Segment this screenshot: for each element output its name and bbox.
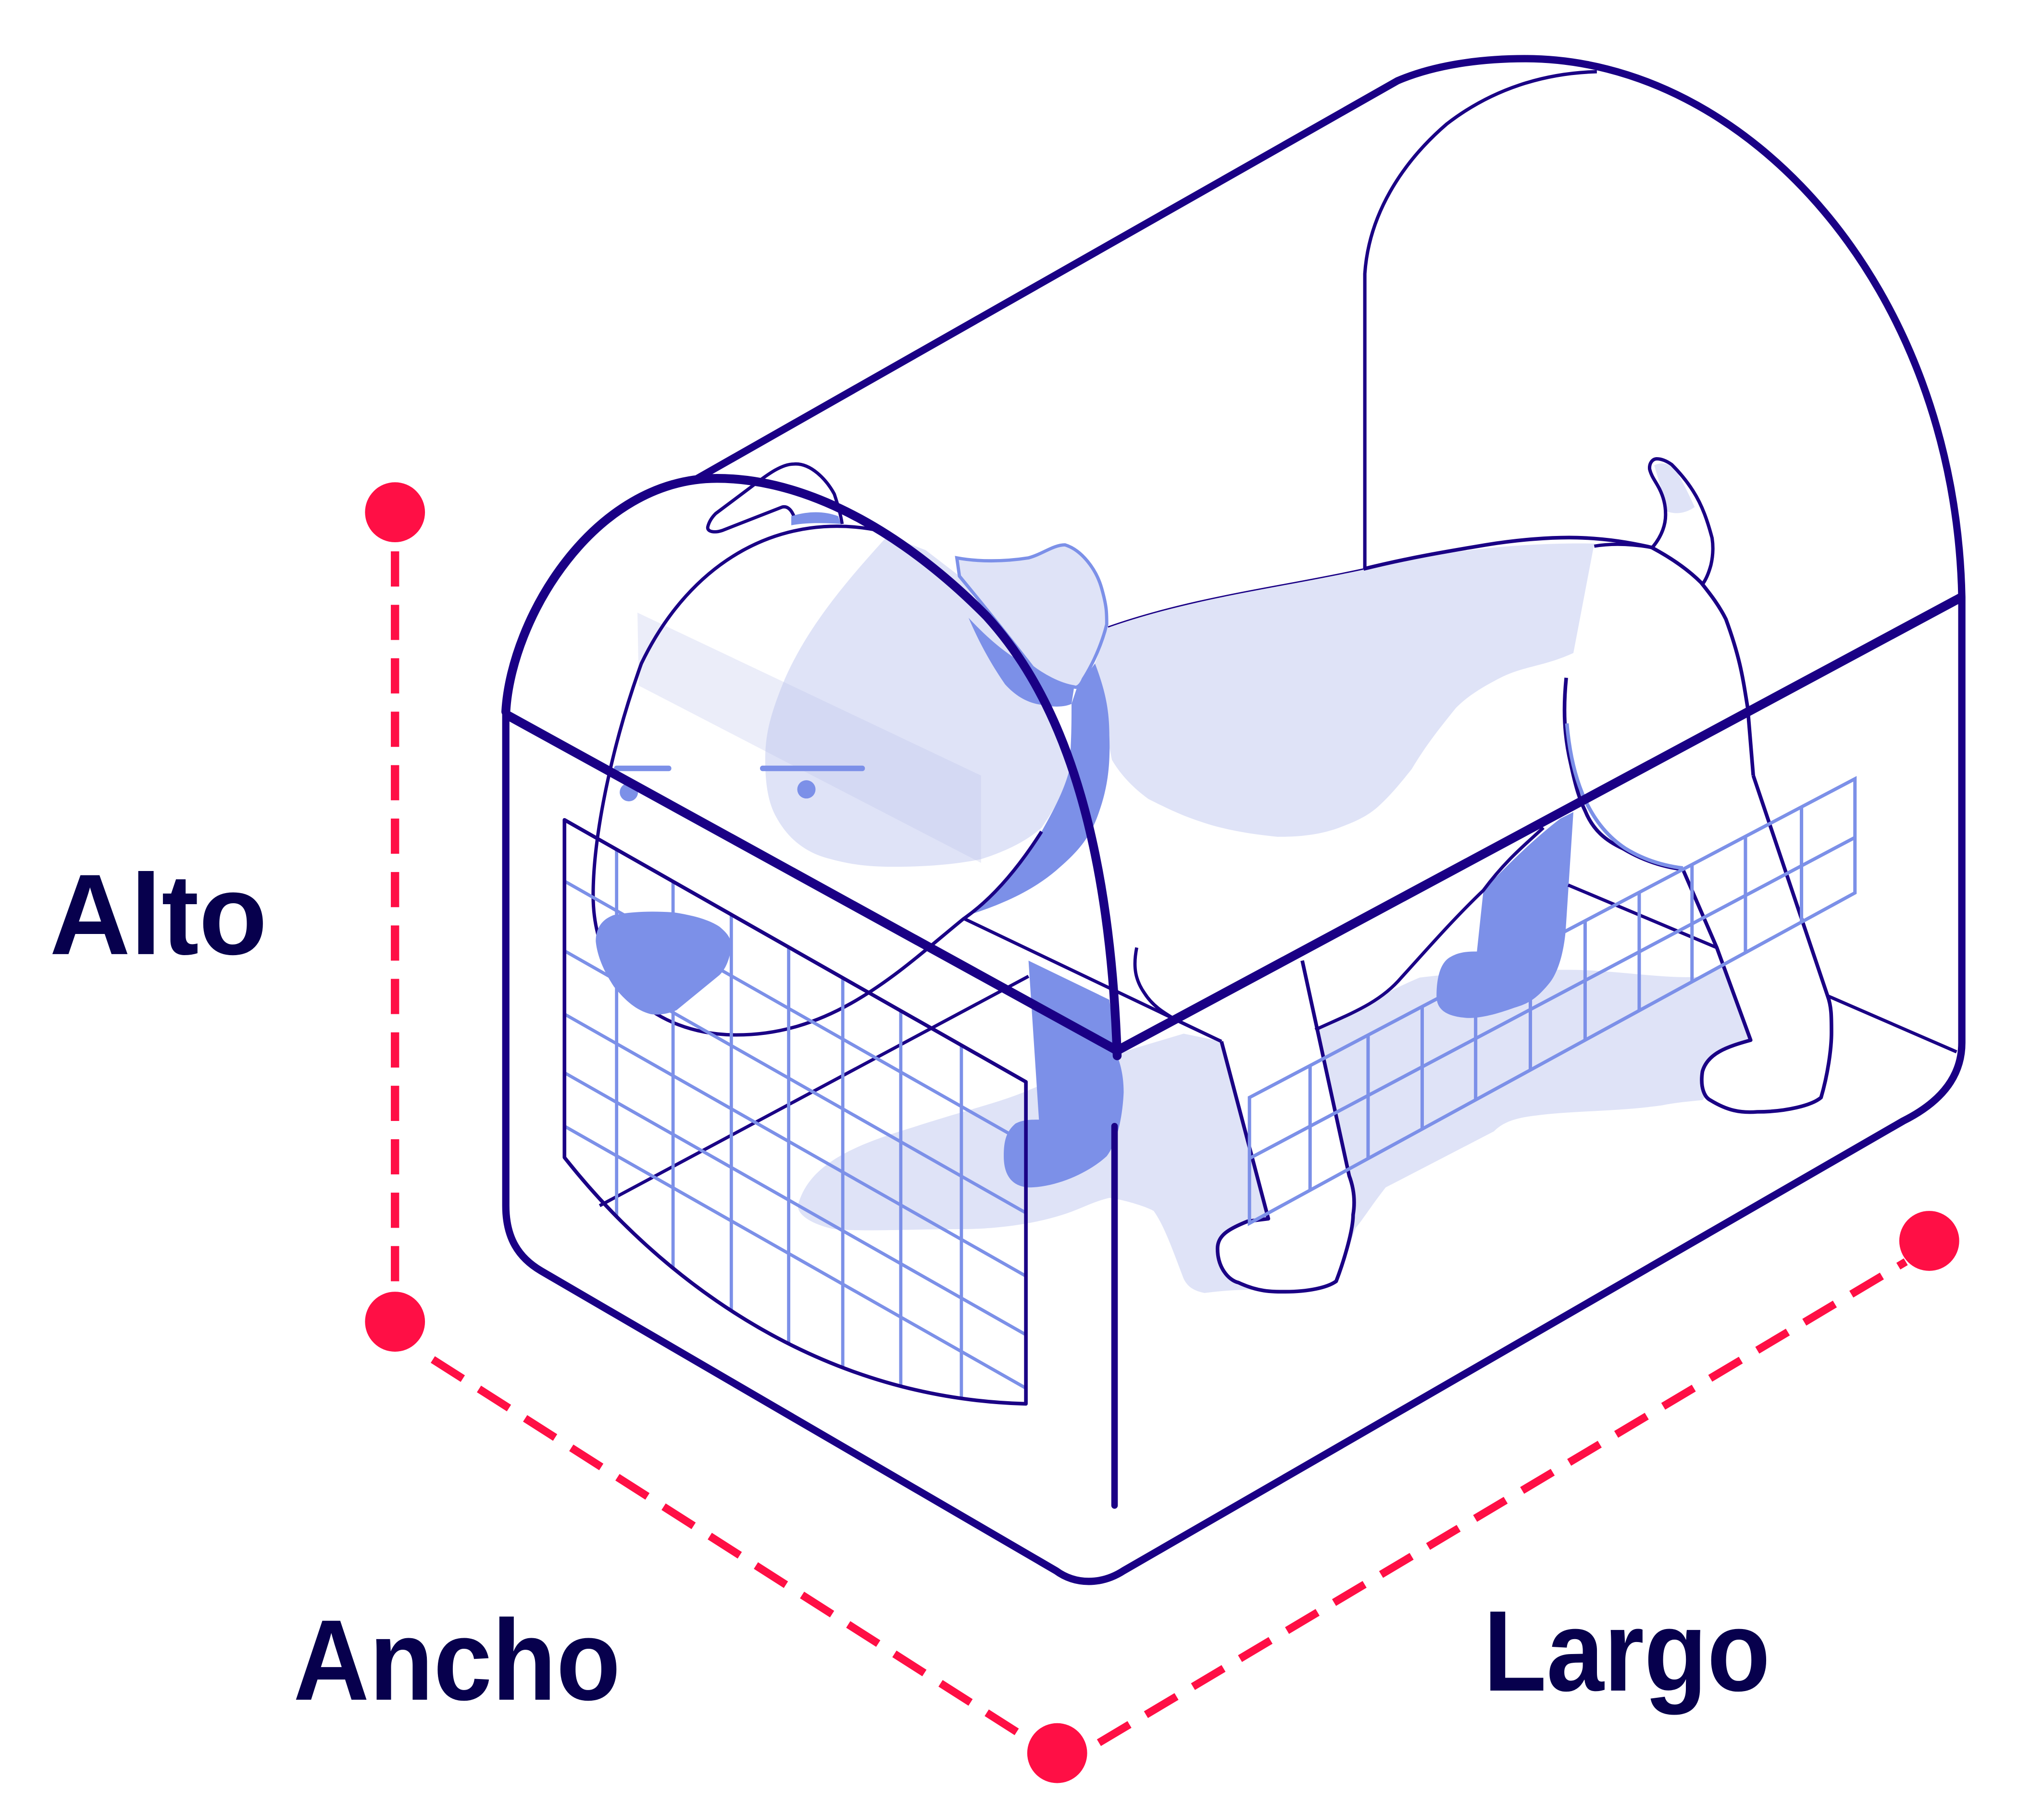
- dog left ear outline: [708, 464, 842, 532]
- rear dog leg: [1565, 678, 1832, 1112]
- label: alto: Alto: [50, 850, 267, 979]
- haunch line: [1135, 947, 1221, 1042]
- dog body shading: [1095, 544, 1594, 837]
- label: ancho: Ancho: [293, 1596, 621, 1724]
- back door arch: [1365, 72, 1597, 568]
- front window mesh: [564, 820, 1026, 1404]
- dog head shading: [765, 535, 1069, 867]
- ear shadow: [969, 618, 1074, 707]
- dog front paw (blue): [1004, 960, 1124, 1187]
- floor shadow: [798, 965, 1751, 1293]
- dimension: alto: [365, 482, 425, 1352]
- dog head outline: [593, 526, 1042, 1035]
- dog ear: [957, 545, 1107, 707]
- rear mesh grid: [1249, 769, 1855, 1251]
- front-right dog leg: [1218, 960, 1354, 1292]
- dog tail: [1649, 459, 1713, 584]
- dog eyebrows and eyes: [614, 766, 865, 801]
- neck shadow: [969, 663, 1109, 915]
- carrier front arch: [506, 478, 1117, 1056]
- dog rear paw (blue): [1436, 812, 1573, 1018]
- carrier top edges: [506, 597, 1962, 1051]
- collar tab: [791, 512, 841, 525]
- carrier front corner line: [1113, 1126, 1116, 1506]
- thigh highlight: [1567, 723, 1683, 868]
- translucent head band: [637, 612, 981, 863]
- belly line: [1315, 828, 1544, 1030]
- dimension: ancho: [433, 1359, 1087, 1783]
- dimension: largo: [1099, 1211, 1959, 1742]
- dog nose: [596, 912, 731, 1015]
- carrier outline: [506, 59, 1962, 1581]
- label: largo: Largo: [1483, 1587, 1770, 1715]
- interior floor lines: [599, 885, 1957, 1206]
- spine and rump line: [1108, 537, 1753, 775]
